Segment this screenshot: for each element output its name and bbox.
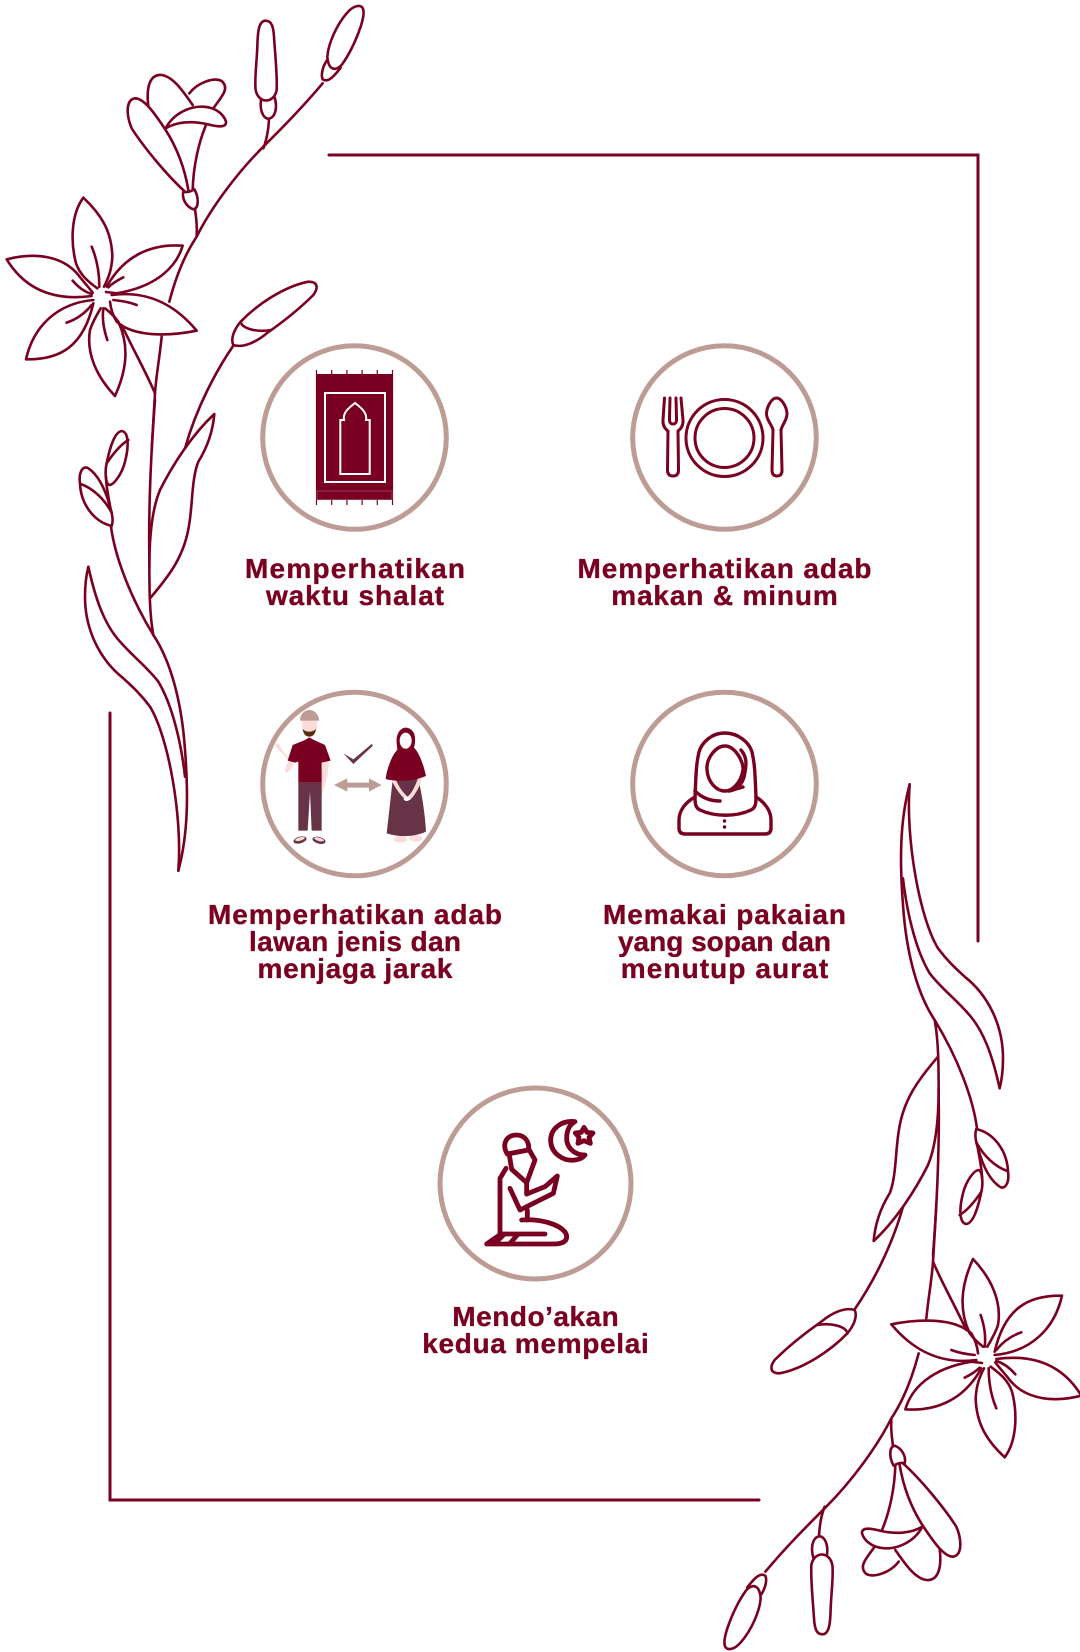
label: Mendo’akan	[452, 1301, 619, 1332]
label: Memakai pakaian	[603, 899, 846, 930]
frame: top and right border	[329, 155, 978, 941]
label: waktu shalat	[265, 580, 444, 611]
item: adab lawan jenis	[208, 692, 502, 984]
label: Memperhatikan adab	[578, 553, 872, 584]
label	[245, 553, 465, 611]
icon circle	[440, 1088, 631, 1279]
label: makan & minum	[611, 580, 838, 611]
frame: left and bottom border	[110, 713, 759, 1500]
icon circle	[633, 692, 816, 876]
label: Memperhatikan adab	[208, 899, 502, 930]
icon: prayer rug	[316, 370, 393, 505]
item: waktu shalat	[245, 346, 465, 611]
double arrow	[334, 778, 382, 792]
icon: kneeling person praying with crescent and star	[487, 1121, 593, 1244]
label: menutup aurat	[621, 953, 828, 984]
label: yang sopan dan	[618, 926, 831, 957]
icon: woman in hijab	[679, 733, 771, 834]
item: mendo'akan	[422, 1088, 649, 1359]
label: kedua mempelai	[422, 1328, 649, 1359]
icon: man and woman keeping distance	[275, 710, 426, 845]
floral branch: bottom right	[724, 784, 1080, 1649]
item: adab makan	[578, 346, 872, 611]
label	[208, 899, 502, 984]
floral branch: top left	[7, 6, 364, 871]
label	[578, 553, 872, 611]
label	[603, 899, 846, 984]
woman	[386, 728, 426, 843]
item: pakaian sopan	[603, 692, 846, 984]
check mark	[343, 744, 373, 764]
icon circle	[633, 346, 816, 529]
icon circle	[263, 692, 446, 876]
label	[422, 1301, 649, 1359]
icon circle	[263, 346, 446, 529]
label: Memperhatikan	[245, 553, 465, 584]
man	[275, 710, 331, 845]
icon: plate, fork and spoon	[663, 398, 787, 476]
label: lawan jenis dan	[249, 926, 461, 957]
label: menjaga jarak	[258, 953, 453, 984]
